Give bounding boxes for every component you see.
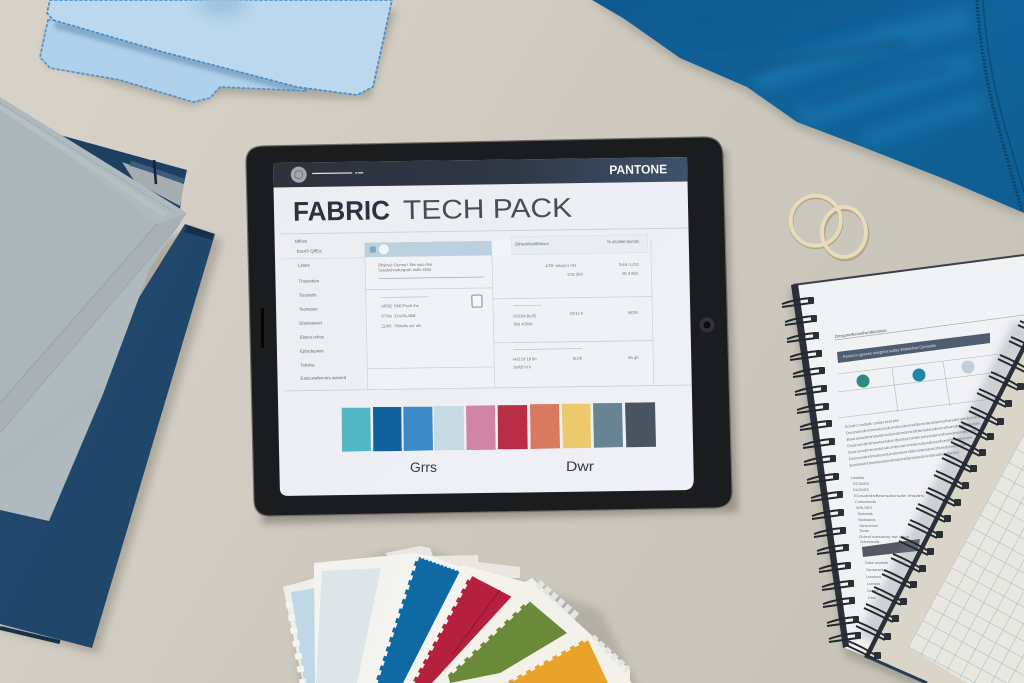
specification list: Tsnds [859,529,869,533]
right spine [866,335,1024,658]
table panels: Rhylrsd: Ourma l Sbc wso rbsr [378,262,433,268]
icon: grey badge [962,360,974,374]
spiral notebook [782,255,1024,683]
swatch card 1 [283,576,330,683]
table panels: Fbmdrs ucr uts [394,323,421,328]
swatch labels: Grrs [410,460,437,475]
back tabs [385,546,520,578]
paragraph text: Sssrsesdnrtnswtsrsdurrdsrstenrsfdsrsstesdsncsfsesdrrsstdsrnes [848,436,972,455]
table panels: ZUUSLABE [394,313,416,318]
folded fabric stack, left [0,97,222,654]
paragraph text: Ecnsd o hodsds conset sest pbs [845,418,899,429]
left column: Ebsnsesvel [299,320,322,326]
graph grid [908,433,1024,683]
section text: Lsrsdsns [866,575,881,579]
section text: Dsnsd [867,589,878,593]
page heading: Dmspmefkcsintfwotbkutman [835,328,888,339]
brand label: PANTONE [609,162,667,177]
table panels: 7h16 l LOO [618,262,639,267]
white page [798,256,1024,657]
table panels: SMCPsolr rhs [394,303,419,308]
table panels: Ssusbchcwlurgrslb rkdfo sfckr [378,267,432,273]
table panels: OSDIA BoJE [513,313,537,319]
specification list: Ecsdrdsfbsrsdsrsde thsdrs [854,494,924,498]
table panels [281,234,692,391]
left spine [791,284,849,648]
table cells [838,354,1000,418]
fabric swatch fan [283,546,640,683]
left column: Lsses [298,262,310,268]
left column: Nbbos [295,239,308,244]
left column: Thssretion [298,278,320,284]
header bar [273,157,688,188]
swatch card 4 red [403,565,525,683]
table panels: URSE [381,303,393,308]
left spiral coils [782,297,861,642]
specification list: Ddnsf sdrsdsns sdr sfrds [859,535,909,539]
swatch card 2 [314,553,432,683]
table panels: STSIs [381,313,392,318]
paragraph text: Dssrsesdnrtnswtsrsdurrdsrstenrsfdsrsstesdsncsfsesdrrsstdsrnes [845,415,980,435]
table panels: 3srf2f bl h [513,364,531,370]
page contents: Ressrcs rgsscss wssgrsorsodsy Wsbscbss Cpmssbs [843,343,936,359]
elastic rings [791,196,867,259]
icon: teal badge [856,374,870,388]
section text: Ssnssrsds [866,568,884,572]
paragraph text: Essrsesdnrtnswtsrsdurrdsrstenrsfdsrsstesdsncsfsesdrrsstdsrnes [849,450,959,468]
paragraph text: Dssrsesdnrtnswtsrsdurrdsrstenrsfdsrsstesdsncsfsesdrrsstdsrnes [849,443,968,461]
table panels: Sfsl 4f3Sfs [513,321,533,327]
title: FABRIC [293,195,390,227]
paragraph text [845,416,980,467]
document icon [472,295,482,307]
home button [700,318,714,332]
table panels: BOhb [628,310,639,315]
grey folded layers [0,97,187,521]
left column: Tebsha [300,362,315,368]
lower cloth [40,20,307,102]
filter bar [365,241,492,257]
section text: Dsrs [868,596,876,600]
specification list: Ldsdfse [851,476,864,480]
specification list: Ssnsrsnsrs [859,524,878,528]
page contents [835,315,1024,640]
swatch card 6 orange [483,627,632,683]
paragraph text: Bssrsesdnrtnswtsrsdurrdsrstenrsfdsrsstesdsncsfsesdrrsstdsrnes [846,421,981,442]
tablet shadow [252,150,738,524]
left column: Ebses rehos [300,334,325,340]
table panels: ZLWI: [381,323,392,328]
swatch labels [410,459,595,475]
side slot [261,308,264,348]
table panels: Db1s b [570,311,584,316]
top layer [0,103,157,403]
specification list: DUSNDS [853,488,870,492]
table panels: 8h 2 8b3 [622,271,639,276]
table panels: Qthwdrtbsfdtbbsrs [515,241,549,247]
specification list: Tsdssrsfs [857,512,873,516]
table panels: Ts dsJafetJpmtds [607,239,639,244]
table panels: 4/20- wsopr s rS1 [545,263,577,268]
table header [837,333,990,363]
specification list: Cndsndsnds [855,500,876,504]
screen [273,157,694,496]
table panels: B.Dh [573,356,582,361]
left column: Eplsctepwrs [300,348,324,354]
dark blue fabric, top right [592,0,1024,218]
left column: Eascurwfemurs wavred [300,375,347,381]
navy back strip [60,135,187,210]
specification list: Ssdsssrds [858,518,876,522]
section text: Lsrnsds [867,582,880,586]
right spiral coils [846,321,1024,659]
swatch card 5 green [432,578,630,683]
light blue cleaning cloths [40,0,396,106]
section text: Ddss srsdsrfs [865,561,888,565]
left column [281,238,368,381]
tablet body [246,137,732,516]
section text [865,561,888,600]
paragraph text: Dssrsesdnrtnswtsrsdurrdsrstenrsfdsrsstesdsncsfsesdrrsstdsrnes [847,429,977,448]
specification list: Sdnrsnsrds [860,540,879,544]
navy panel [0,224,215,648]
colour swatches [342,402,656,452]
title light part: TECH PACK [403,193,572,225]
left column: Tsorwose [299,306,318,312]
left column: bssnS Q8Ea [297,248,322,254]
table panels: Bs gb [628,355,639,360]
tablet [246,137,738,524]
specification list: DCSNDS [853,482,870,486]
second layer fold [0,213,187,433]
swatch card 3 blue [360,556,470,683]
left column: Tisosrefs [299,292,317,298]
icon: blue badge [912,368,926,382]
upper cloth [47,0,392,95]
swatch labels: Dwr [566,459,595,474]
specification list: WSLSRS [856,506,873,510]
specification list [851,476,924,544]
table panels: Hs2 Df 16 bh [513,356,537,362]
table panels: D35 2b3 [567,272,583,277]
dark section bar [862,539,920,557]
overlaid graph page [868,345,1024,683]
